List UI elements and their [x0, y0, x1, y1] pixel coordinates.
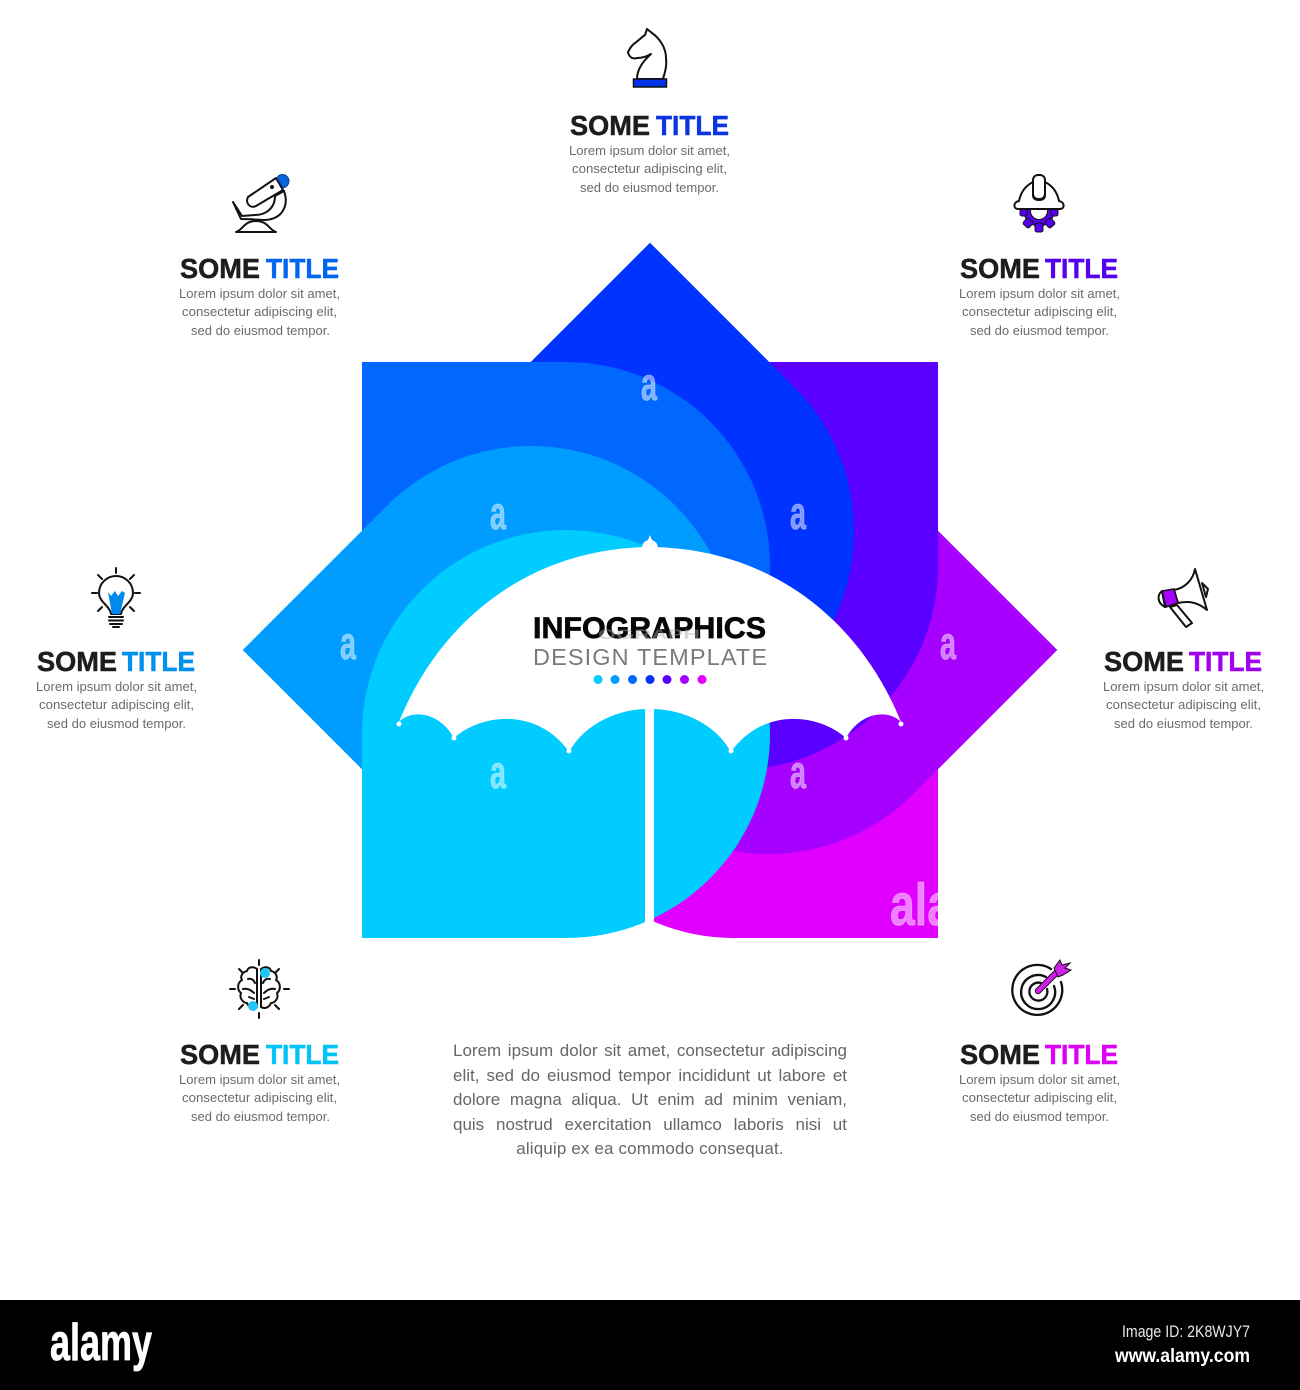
watermark letters on the star: a — [790, 746, 806, 798]
watermark letters on the star: a — [490, 487, 506, 539]
block: upper right title: consectetur adipiscing elit, — [962, 304, 1117, 319]
block: upper left title: SOME — [180, 253, 260, 284]
block: right title: sed do eiusmod tempor. — [1114, 716, 1253, 731]
footer bar with watermark credit: Image ID: 2K8WJY7 — [1122, 1322, 1250, 1341]
bottom paragraph: quis nostrud exercitation ullamco laboris nisi ut — [453, 1114, 847, 1134]
center heading: INFOGRAPHICS — [533, 612, 766, 645]
central star of seven teardrop shapes — [243, 243, 1057, 938]
block: lower right title: consectetur adipiscing elit, — [962, 1090, 1117, 1105]
center heading — [533, 612, 767, 670]
watermark letters on the star: a — [490, 746, 506, 798]
block: lower right title: sed do eiusmod tempor. — [970, 1109, 1109, 1124]
bottom paragraph: Lorem ipsum dolor sit amet, consectetur adipiscing — [453, 1041, 847, 1060]
block: left title — [36, 646, 197, 731]
block: top title: consectetur adipiscing elit, — [572, 161, 727, 176]
block: upper right title: SOME — [960, 253, 1040, 284]
icon: light bulb — [92, 568, 140, 627]
watermark letters on the star: a — [641, 358, 657, 410]
block: lower left title: TITLE — [266, 1039, 339, 1070]
block: upper left title: sed do eiusmod tempor. — [191, 323, 330, 338]
block: lower right title: SOME — [960, 1039, 1040, 1070]
footer bar with watermark credit — [0, 1300, 1300, 1390]
block: left title: TITLE — [122, 646, 195, 677]
block: lower left title: sed do eiusmod tempor. — [191, 1109, 330, 1124]
block: lower right title: TITLE — [1045, 1039, 1118, 1070]
bottom paragraph: aliquip ex ea commodo consequat. — [516, 1139, 784, 1158]
footer bar with watermark credit: www.alamy.com — [1114, 1346, 1250, 1367]
block: lower left title: consectetur adipiscing elit, — [182, 1090, 337, 1105]
icon: helmet with gear — [1014, 175, 1064, 232]
watermark letters on the star: a — [790, 487, 806, 539]
icon: microscope — [233, 174, 289, 232]
block: lower left title — [179, 1039, 340, 1124]
block: right title: SOME — [1104, 646, 1184, 677]
center heading: OGRAPH — [598, 626, 700, 642]
block: top title: TITLE — [656, 110, 729, 141]
block: right title: TITLE — [1189, 646, 1262, 677]
icon: brain — [230, 960, 289, 1018]
block: upper left title: TITLE — [266, 253, 339, 284]
block: upper right title: sed do eiusmod tempor. — [970, 323, 1109, 338]
block: top title: sed do eiusmod tempor. — [580, 180, 719, 195]
bottom paragraph: dolore magna aliqua. Ut enim ad minim veniam, — [453, 1090, 847, 1109]
block: right title — [1103, 646, 1264, 731]
footer bar with watermark credit: alamy — [50, 1314, 152, 1372]
center heading: DESIGN TEMPLATE — [533, 644, 767, 670]
block: left title: SOME — [37, 646, 117, 677]
icon: target with dart — [1012, 960, 1071, 1015]
watermark letters on the star: a — [340, 617, 356, 669]
block: right title: Lorem ipsum dolor sit amet, — [1103, 679, 1264, 694]
icon: megaphone — [1159, 569, 1208, 627]
block: upper right title — [959, 253, 1120, 338]
watermark letters on the star — [340, 358, 956, 938]
watermark letters on the star: a — [940, 617, 956, 669]
block: right title: consectetur adipiscing elit, — [1106, 697, 1261, 712]
block: left title: consectetur adipiscing elit, — [39, 697, 194, 712]
block: upper left title — [179, 253, 340, 338]
block: top title: SOME — [570, 110, 650, 141]
bottom paragraph — [453, 1041, 847, 1158]
block: lower left title: Lorem ipsum dolor sit amet, — [179, 1072, 340, 1087]
block: upper left title: Lorem ipsum dolor sit amet, — [179, 286, 340, 301]
block: upper right title: TITLE — [1045, 253, 1118, 284]
block: lower right title: Lorem ipsum dolor sit amet, — [959, 1072, 1120, 1087]
umbrella — [396, 535, 904, 925]
block: left title: Lorem ipsum dolor sit amet, — [36, 679, 197, 694]
block: lower left title: SOME — [180, 1039, 260, 1070]
block: top title: Lorem ipsum dolor sit amet, — [569, 143, 730, 158]
block: upper right title: Lorem ipsum dolor sit amet, — [959, 286, 1120, 301]
watermark letters on the star: ala — [890, 872, 953, 938]
bottom paragraph: elit, sed do eiusmod tempor incididunt ut labore et — [453, 1066, 847, 1084]
center dots — [594, 675, 706, 684]
block: left title: sed do eiusmod tempor. — [47, 716, 186, 731]
block: upper left title: consectetur adipiscing elit, — [182, 304, 337, 319]
block: lower right title — [959, 1039, 1120, 1124]
block: top title — [569, 110, 730, 195]
icon: chess knight — [628, 29, 666, 87]
